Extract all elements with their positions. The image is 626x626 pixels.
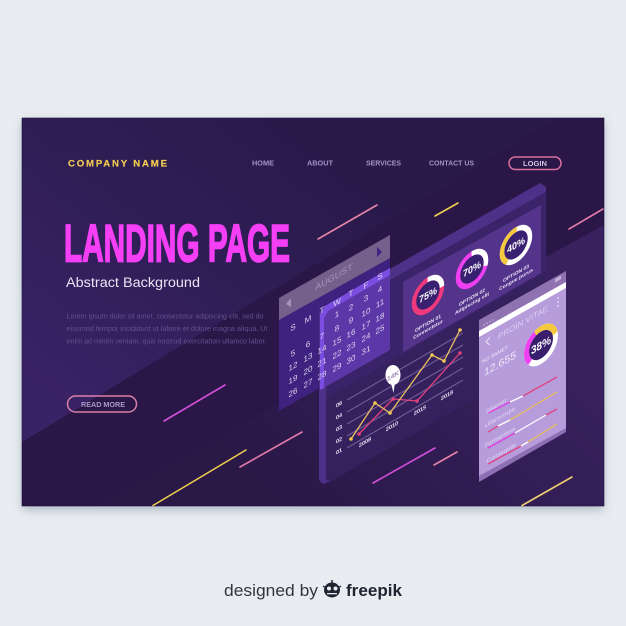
donut: option 01: 75%: [419, 285, 437, 306]
calendar text: 24: [362, 330, 371, 344]
calendar text: 22: [333, 347, 342, 361]
line chart: 2008: [359, 436, 372, 449]
calendar text: 14: [318, 342, 327, 356]
calendar overlap highlight: [320, 268, 390, 390]
donut: option 03: [496, 212, 536, 278]
calendar text: 28: [318, 368, 327, 382]
body text: enim ad minim veniam, quis nostrud exercitation ullamco labor.: [66, 338, 267, 346]
calendar text: 1: [335, 308, 339, 320]
footer credit: [224, 580, 403, 600]
calendar text: 7: [320, 330, 324, 342]
calendar text: 27: [304, 376, 313, 390]
donut: option 02: 70%: [463, 259, 481, 280]
calendar text: 2: [349, 301, 353, 313]
calendar text: 9: [349, 314, 353, 326]
subtitle: Abstract Background: [66, 275, 200, 290]
calendar header: [279, 235, 390, 320]
mobile bar list: [485, 377, 557, 465]
line chart: 2018: [441, 389, 454, 402]
calendar text: 19: [289, 372, 298, 386]
calendar text: 23: [347, 339, 356, 353]
chart callout: [386, 365, 400, 393]
calendar text: 21: [318, 355, 327, 369]
mobile bar list: Consequat: [487, 442, 516, 465]
icon: calendar previous arrow: [286, 298, 291, 307]
line chart: 02: [336, 436, 343, 446]
chart callout: 14K: [387, 370, 399, 383]
calendar text: 11: [376, 296, 384, 310]
calendar text: 8: [335, 322, 339, 334]
calendar text: 29: [333, 360, 342, 374]
donut: 38 percent: 38%: [531, 334, 551, 358]
calendar text: [289, 262, 385, 399]
calendar text: 17: [362, 318, 371, 332]
line chart: 03: [336, 424, 343, 434]
line chart: 04: [336, 412, 343, 422]
donut: option 03: 40%: [507, 235, 525, 256]
caption: option 01: OPTION 01: [415, 314, 441, 334]
mobile heading: PROIN VITAE: [498, 303, 548, 341]
calendar text: 25: [376, 322, 385, 336]
status bar details: [483, 276, 561, 326]
line chart: 06: [336, 400, 343, 410]
calendar text: M: [305, 313, 311, 326]
navigation: CONTACT US: [429, 158, 474, 168]
navigation: SERVICES: [366, 158, 401, 168]
caption: option 01: Connectetur: [413, 318, 444, 341]
calendar text: S: [377, 270, 383, 282]
diagonal accent lines: [153, 203, 603, 506]
mobile figure: 12.655: [484, 349, 516, 379]
calendar text: 15: [333, 334, 342, 348]
calendar text: S: [290, 321, 296, 333]
calendar text: 3: [364, 292, 368, 304]
calendar text: 13: [304, 350, 313, 364]
calendar text: 31: [362, 343, 371, 357]
calendar text: 4: [378, 283, 382, 295]
calendar text: W: [333, 295, 342, 309]
login button: [509, 157, 561, 170]
icon: calendar next arrow: [377, 247, 382, 257]
mobile bar list: Sitamet: [486, 397, 506, 416]
donut: option 02: [458, 245, 486, 293]
read more button: [68, 396, 136, 412]
line chart: 01: [336, 447, 343, 457]
body text: [66, 314, 268, 346]
caption: option 02: Adipiscing elit: [455, 291, 489, 317]
calendar text: T: [349, 287, 354, 299]
footer credit: designed by: [224, 582, 319, 600]
calendar text: 26: [289, 385, 298, 399]
panel: landing page card: [22, 118, 604, 506]
navigation: ABOUT: [307, 158, 333, 168]
calendar text: AUGUST: [315, 262, 353, 294]
caption: option 03: OPTION 03: [503, 264, 529, 284]
panel: calendar: [279, 235, 390, 411]
body text: eiusmod tempor incididunt ut labore et dolore magna aliqua. Ut: [66, 326, 268, 333]
calendar text: 10: [362, 305, 371, 319]
icon: back arrow: [486, 337, 490, 345]
navigation: [252, 158, 474, 168]
calendar text: T: [320, 304, 325, 316]
panel: mobile screen: [479, 271, 566, 482]
panel: option donuts: [403, 205, 541, 352]
donut: option 01: [414, 271, 442, 319]
login button: LOGIN: [523, 159, 547, 168]
icon: freepik mascot: [323, 580, 341, 598]
read more button: READ MORE: [81, 400, 125, 409]
calendar text: F: [364, 279, 368, 291]
panel: dashboard board: [319, 183, 546, 484]
line chart: 2010: [386, 420, 399, 433]
navigation: HOME: [252, 158, 274, 168]
calendar text: 6: [306, 338, 310, 350]
calendar text: 5: [291, 347, 295, 359]
body text: Lorem ipsum dolor sit amet, consectetur adipiscing elit, sed do: [66, 314, 264, 320]
caption: option 02: OPTION 02: [459, 288, 485, 308]
title: LANDING PAGE: [64, 214, 290, 273]
mobile bar list: Ullamcorpe: [485, 405, 516, 430]
calendar text: 12: [289, 359, 298, 373]
mobile bar list: Fermentum: [485, 425, 515, 450]
company name: COMPANY NAME: [68, 158, 168, 170]
footer credit: freepik: [346, 581, 403, 600]
donut: 38 percent: [521, 310, 561, 380]
calendar text: 16: [347, 326, 356, 340]
line chart: [336, 328, 463, 457]
mobile figure: NO SAMET: [482, 344, 509, 365]
icon: menu dots: [557, 297, 559, 307]
caption: option 03: Congue purus: [499, 267, 533, 293]
calendar text: 20: [304, 363, 313, 377]
line chart: 2015: [414, 404, 427, 417]
calendar text: 18: [376, 310, 385, 324]
calendar text: 30: [347, 352, 356, 366]
